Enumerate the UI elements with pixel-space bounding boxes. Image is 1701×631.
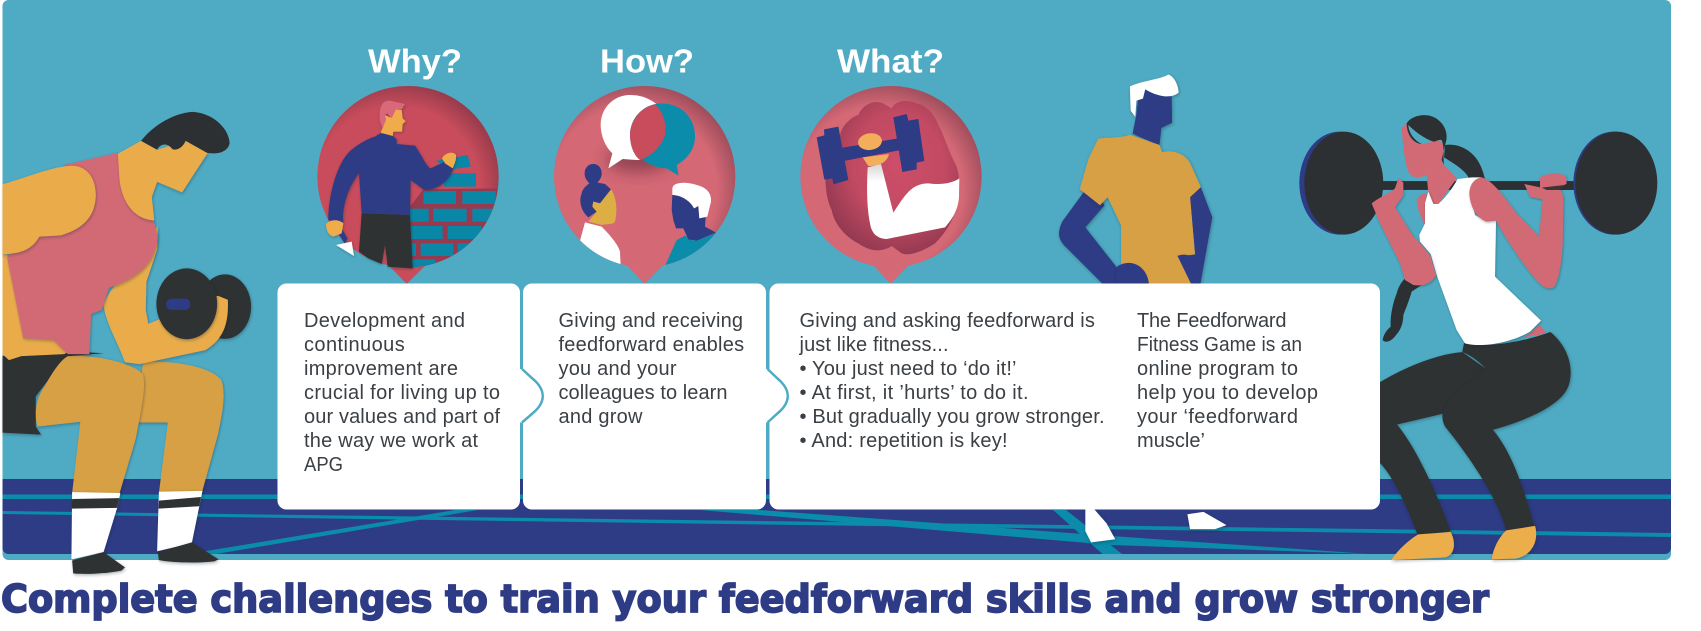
arrow: Why to How (518, 369, 543, 422)
card: Why text: continuous (304, 334, 405, 356)
curling arm (104, 225, 228, 364)
card: What text: help you to develop (1137, 382, 1318, 404)
icon: How circle, two people talking (554, 86, 735, 284)
floor with track lines (2, 479, 1671, 555)
brain (826, 101, 959, 254)
shorts (2, 350, 104, 435)
card: How text: feedforward enables (558, 334, 744, 356)
card: What text: online program to (1137, 358, 1298, 380)
lower braid (1383, 278, 1422, 342)
card: What text: your ‘feedforward (1137, 406, 1298, 428)
builder (326, 101, 456, 268)
speech bubbles (601, 95, 695, 176)
legs and shoes (1380, 332, 1571, 560)
back dumbbell weight (199, 274, 251, 339)
barbell (1299, 132, 1657, 235)
icon: Why circle, man building a wall (317, 86, 500, 284)
card: Why text (278, 284, 520, 510)
card: What text (770, 284, 1380, 510)
card: Why text: the way we work at (304, 430, 478, 452)
card: What text: • And: repetition is key! (800, 430, 1008, 452)
card: What text: • You just need to ‘do it!’ (800, 358, 1016, 380)
card: What text: just like fitness... (798, 334, 948, 356)
card: Why text: crucial for living up to (304, 382, 500, 404)
arrow: How to What (764, 369, 788, 422)
card: What text: Fitness Game is an (1137, 334, 1302, 356)
card: Why text: APG (304, 454, 343, 476)
figure: woman squatting with barbell (1299, 115, 1657, 560)
two people (580, 164, 716, 265)
card: How text: and grow (558, 406, 643, 428)
shoes (72, 542, 219, 574)
tank top (7, 153, 158, 354)
upper body (1372, 115, 1573, 345)
card: What text: muscle’ (1137, 430, 1205, 452)
card: What text: Giving and asking feedforward is (800, 310, 1095, 332)
dumbbell (817, 114, 924, 184)
front leg (36, 356, 144, 493)
figure: man curling a dumbbell (2, 112, 251, 574)
card: How text: Giving and receiving (558, 310, 743, 332)
heading: What?: What? (837, 42, 944, 80)
brick wall (409, 155, 500, 273)
neck and face (118, 141, 208, 221)
card: Why text: our values and part of (304, 406, 500, 428)
card: Why text: Development and (304, 310, 465, 332)
figure: standing man behind the card (1059, 74, 1226, 542)
card: How text: colleagues to learn (558, 382, 728, 404)
card: How text (523, 284, 766, 510)
card: What text: • At first, it ’hurts’ to do it. (800, 382, 1028, 404)
heading: How?: How? (600, 42, 694, 80)
hair (141, 112, 230, 153)
card: Why text: improvement are (304, 358, 458, 380)
back leg (137, 362, 224, 493)
flexing arm (857, 132, 959, 239)
title: Complete challenges to train your feedforward skills and grow stronger (1, 577, 1489, 621)
icon: What circle, brain lifting a dumbbell (800, 86, 982, 284)
card: How text: you and your (558, 358, 677, 380)
front dumbbell weight (156, 268, 217, 339)
shoulder and upper arm (2, 166, 96, 254)
socks (71, 491, 202, 559)
card: What text: • But gradually you grow stronger. (800, 406, 1104, 428)
lower back skin (2, 254, 68, 360)
heading: Why?: Why? (368, 42, 462, 80)
card: What text: The Feedforward (1137, 310, 1286, 332)
